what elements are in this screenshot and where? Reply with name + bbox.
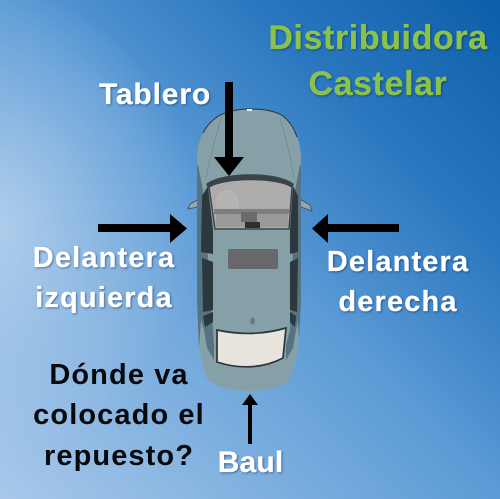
roof panel [228, 249, 278, 269]
front hood tag [247, 109, 252, 111]
rear window [217, 328, 286, 367]
car body [197, 109, 301, 391]
label: Delantera izquierda [33, 242, 176, 316]
title: Distribuidora Castelar: Castelar [308, 65, 448, 103]
arrow: Delantera izquierda [98, 214, 187, 243]
title: Distribuidora Castelar: Distribuidora [268, 19, 488, 57]
question text [33, 359, 205, 472]
title: Distribuidora Castelar [268, 19, 489, 103]
question text: colocado el [33, 399, 205, 431]
slate side panel right [286, 165, 301, 360]
windshield [209, 180, 292, 229]
car mirrors [188, 197, 312, 211]
question text: repuesto? [44, 440, 194, 472]
label: Tablero: Tablero [99, 78, 211, 111]
label: Delantera derecha: Delantera [327, 246, 469, 278]
label: Baul: Baul [218, 446, 283, 479]
label: Delantera derecha: derecha [338, 286, 458, 318]
label: Delantera izquierda: izquierda [35, 282, 173, 314]
label: Delantera izquierda: Delantera [33, 242, 175, 274]
dashboard and seats seen through windshield [214, 190, 290, 228]
arrow: Tablero [214, 82, 244, 176]
windshield frame [206, 174, 294, 188]
slate side panel left [197, 165, 214, 360]
question text: Dónde va [49, 359, 189, 391]
arrow: Baul [242, 394, 258, 444]
icon: car seen from above [188, 109, 312, 391]
dark outline of hood [203, 109, 297, 137]
side windows left [201, 186, 213, 327]
arrow: Delantera derecha [312, 214, 399, 243]
antenna [250, 317, 255, 325]
hood crease lines [206, 118, 294, 178]
side windows right [290, 186, 298, 327]
label: Delantera derecha [327, 246, 470, 318]
